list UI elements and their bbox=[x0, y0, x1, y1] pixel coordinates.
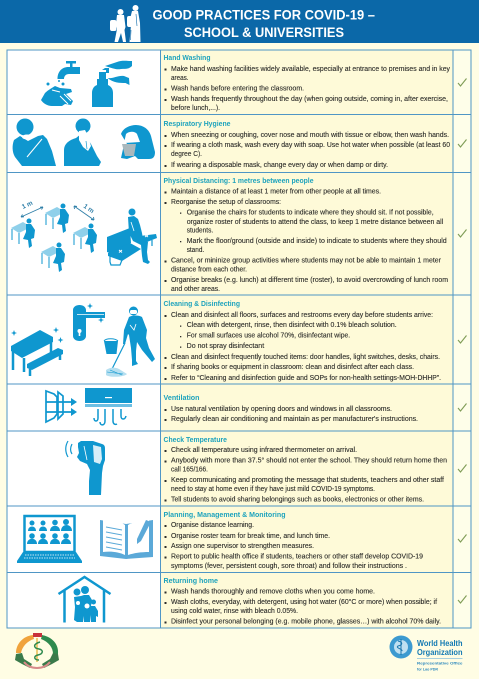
check mark bbox=[458, 78, 466, 86]
panel: physical distancing text bbox=[164, 178, 448, 293]
icon: door handle bbox=[73, 305, 105, 341]
panel: cleaning and disinfecting text: Clean with detergent, rinse, then disinfect with 0.1% bleach solution. bbox=[187, 322, 397, 329]
panel: cleaning and disinfecting text: Do not spray disinfectant bbox=[187, 343, 264, 350]
icon: air conditioner bbox=[85, 388, 132, 403]
icon: ventilation window and air conditioner bbox=[46, 388, 132, 425]
panel: physical distancing text: Organise breaks (e.g. lunch) at different time (roster), to avoid overcrowding of lunch room bbox=[171, 277, 448, 284]
icon: washing hands bbox=[41, 86, 73, 106]
arrow: one metre right: 1 m bbox=[82, 203, 95, 215]
panel: physical distancing text: Cancel, or mininize group activities where students may not be able to maintain 1 meter bbox=[171, 258, 442, 264]
panel: planning, management and monitoring text: Organise distance learning. bbox=[171, 522, 254, 529]
panel: hand washing text: before lunch,...). bbox=[171, 105, 220, 112]
panel: physical distancing text: Reorganise the setup of classrooms: bbox=[171, 199, 281, 206]
panel: respiratory hygiene text: When sneezing or coughing, cover nose and mouth with tissue or elbow, then wash hands. bbox=[171, 132, 449, 139]
icon: coughing into elbow bbox=[16, 118, 34, 136]
panel: ventilation text: Regularly clean air conditioning and maintain as per manufacturer's instructions. bbox=[171, 416, 418, 423]
panel: planning, management and monitoring text: symptoms (fever, persistent cough, sore throat) and follow their instructions . bbox=[171, 563, 407, 570]
panel: physical distancing text: Physical Distancing: 1 metres between people bbox=[164, 178, 314, 185]
icon: cleaner with mop bbox=[129, 306, 138, 316]
panel: ventilation text: Ventilation bbox=[164, 395, 200, 402]
panel: hand washing text: Hand Washing bbox=[164, 55, 210, 62]
panel: physical distancing text: Mark the floor/ground (outside and inside) to indicate to students where they should bbox=[187, 238, 447, 245]
panel: ventilation text: Use natural ventilation by opening doors and windows in all classrooms. bbox=[171, 406, 392, 413]
icon: laptop with video call bbox=[24, 516, 74, 552]
panel: physical distancing text: students. bbox=[187, 228, 213, 234]
icon: infrared thermometer bbox=[66, 441, 105, 495]
panel: planning, management and monitoring text: Organise roster team for break time, and lunch time. bbox=[171, 533, 330, 540]
icon: student at desk 2 bbox=[45, 204, 69, 233]
panel: returning home text: Returning home bbox=[164, 578, 218, 585]
panel: cleaning and disinfecting text: If sharing books or equipment in classroom: clean and disinfect after each class. bbox=[171, 364, 414, 371]
panel: check temperature text bbox=[164, 437, 447, 504]
panel: cleaning and disinfecting text: For small surfaces use alcohol 70%, disinfectant wipe. bbox=[187, 332, 350, 340]
panel: returning home text: using cold water, rinse with bleach 0.05%. bbox=[171, 608, 298, 615]
panel: returning home text: Wash hands thoroughly and remove cloths when you come home. bbox=[171, 588, 375, 596]
title bbox=[152, 8, 375, 40]
header banner bbox=[0, 0, 479, 43]
logo: World Health Organization: World Health bbox=[417, 638, 462, 648]
title: SCHOOL & UNIVERSITIES bbox=[184, 25, 344, 40]
icon: table, door handle and cleaner bbox=[11, 303, 155, 377]
icon: hand washing bbox=[41, 61, 132, 107]
icon: sparkles bbox=[11, 303, 104, 343]
icon: woman fitting a mask bbox=[121, 125, 155, 159]
panel: check temperature text: call 165/166. bbox=[171, 466, 208, 474]
panel: ventilation text bbox=[164, 395, 418, 423]
panel: cleaning and disinfecting text bbox=[164, 301, 441, 382]
logo: World Health Organization: Organization bbox=[417, 647, 462, 657]
panel: hand washing text: areas. bbox=[171, 75, 189, 82]
icon: student at desk 4 bbox=[41, 242, 65, 272]
panel: cleaning and disinfecting text: Cleaning & Disinfecting bbox=[164, 301, 240, 308]
panel: check temperature text: Keep communicating and promoting the message that students, teachers and other staff bbox=[171, 477, 444, 484]
check mark bbox=[458, 404, 466, 411]
icon: person on a bench with marked seats bbox=[107, 208, 157, 265]
panel: returning home text bbox=[164, 578, 441, 626]
logo: World Health Organization: Representative Office bbox=[417, 662, 462, 666]
icon: tap bbox=[58, 61, 80, 79]
panel: physical distancing text: stand. bbox=[187, 247, 204, 254]
panel: respiratory hygiene text: If wearing a disposable mask, change every day or when damp or dirty. bbox=[171, 162, 388, 169]
title: GOOD PRACTICES FOR COVID-19 – bbox=[152, 8, 375, 22]
panel: planning, management and monitoring text bbox=[164, 512, 423, 570]
panel: physical distancing text: and other areas. bbox=[171, 286, 220, 293]
panel: physical distancing text: Maintain a distance of at least 1 meter from other people at all times. bbox=[171, 188, 381, 196]
panel: respiratory hygiene text: If wearing a cloth mask, wash every day with soap. Use hot water when possible (at least 60 bbox=[171, 142, 450, 149]
icon: sneezing into tissue bbox=[76, 118, 90, 134]
panel: physical distancing text: distance from each other. bbox=[171, 266, 247, 274]
panel: hand washing text bbox=[164, 55, 450, 112]
panel: planning, management and monitoring text: Planning, Management & Monitoring bbox=[164, 512, 286, 519]
check mark bbox=[458, 596, 466, 603]
panel: check temperature text: Check all temperature using infrared thermometer on arrival. bbox=[171, 447, 357, 454]
arrow: one metre left: 1 m bbox=[21, 200, 34, 211]
panel: physical distancing text: organize roster of students to attend the class, to keep 1 metre distance between all bbox=[187, 219, 444, 226]
panel: physical distancing text: Organise the chairs for students to indicate where they should sit. If not possible, bbox=[187, 210, 434, 216]
icon: family at home bbox=[58, 577, 110, 622]
panel: planning, management and monitoring text: Report to public health office if students, teachers or other staff develop COVID-19 bbox=[171, 554, 423, 560]
panel: respiratory hygiene text: Respiratory Hygiene bbox=[164, 121, 231, 128]
icon: three people coughing and wearing masks bbox=[13, 118, 155, 166]
panel: cleaning and disinfecting text: Clean and disinfect all floors, surfaces and restrooms every day before students arrive: bbox=[171, 312, 433, 319]
panel: cleaning and disinfecting text: Clean and disinfect frequently touched items: door handles, light switches, desks, chairs. bbox=[171, 354, 440, 361]
icon: laptop and notebook bbox=[17, 516, 153, 563]
check mark bbox=[458, 464, 466, 472]
icon: hands under dispenser bbox=[105, 61, 132, 85]
logo: World Health Organization bbox=[390, 636, 462, 672]
icon: air flow swirls bbox=[94, 409, 126, 425]
panel: check temperature text: Tell students to avoid sharing belongings such as books, electronics or other items. bbox=[171, 496, 424, 504]
icon: student at desk 3 bbox=[73, 224, 97, 253]
logo: World Health Organization: for Lao PDR bbox=[417, 668, 438, 672]
icon: open window with arrows bbox=[46, 391, 74, 422]
panel: hand washing text: Make hand washing facilities widely available, especially at entrance to premises and in key bbox=[171, 66, 450, 73]
icon: student and mother walking bbox=[110, 5, 140, 42]
panel: check temperature text: need to stay at home even if they have just mild COVID-19 symptoms. bbox=[171, 486, 375, 493]
icon: soap bottle bbox=[92, 68, 113, 107]
panel: returning home text: Wash cloths, everyday, with detergent, using hot water (60°C or more) when possible; if bbox=[171, 598, 437, 606]
panel: cleaning and disinfecting text: Refer to “Cleaning and disinfection guide and SOPs for non-health settings-MOH-DHHP”. bbox=[171, 375, 441, 382]
panel: planning, management and monitoring text: Assign one supervisor to strengthen measures. bbox=[171, 543, 314, 550]
logo: Lao Ministry of Health bbox=[15, 633, 59, 668]
icon: bucket bbox=[104, 341, 118, 354]
panel: hand washing text: Wash hands before entering the classroom. bbox=[171, 86, 304, 92]
panel: respiratory hygiene text: degree C). bbox=[171, 151, 202, 158]
panel: hand washing text: Wash hands frequently throughout the day (when going outside, coming in, after exercise, bbox=[171, 96, 448, 103]
icon: open notebook with pencil bbox=[100, 520, 153, 559]
icon: student at desk 1 bbox=[11, 218, 35, 248]
panel: returning home text: Disinfect your personal belonging (e.g. mobile phone, glasses…) with alcohol 70% daily. bbox=[171, 618, 441, 626]
check mark bbox=[458, 140, 466, 147]
icon: table and bench bbox=[11, 330, 53, 358]
panel: check temperature text: Anybody with more than 37.5° should not enter the school. They should return home then bbox=[171, 456, 447, 464]
check mark bbox=[458, 336, 466, 343]
panel: check temperature text: Check Temperature bbox=[164, 437, 227, 444]
panel: respiratory hygiene text bbox=[164, 121, 450, 169]
check mark bbox=[458, 230, 466, 237]
icon: students at spaced desks bbox=[11, 200, 97, 272]
check mark bbox=[458, 534, 466, 542]
